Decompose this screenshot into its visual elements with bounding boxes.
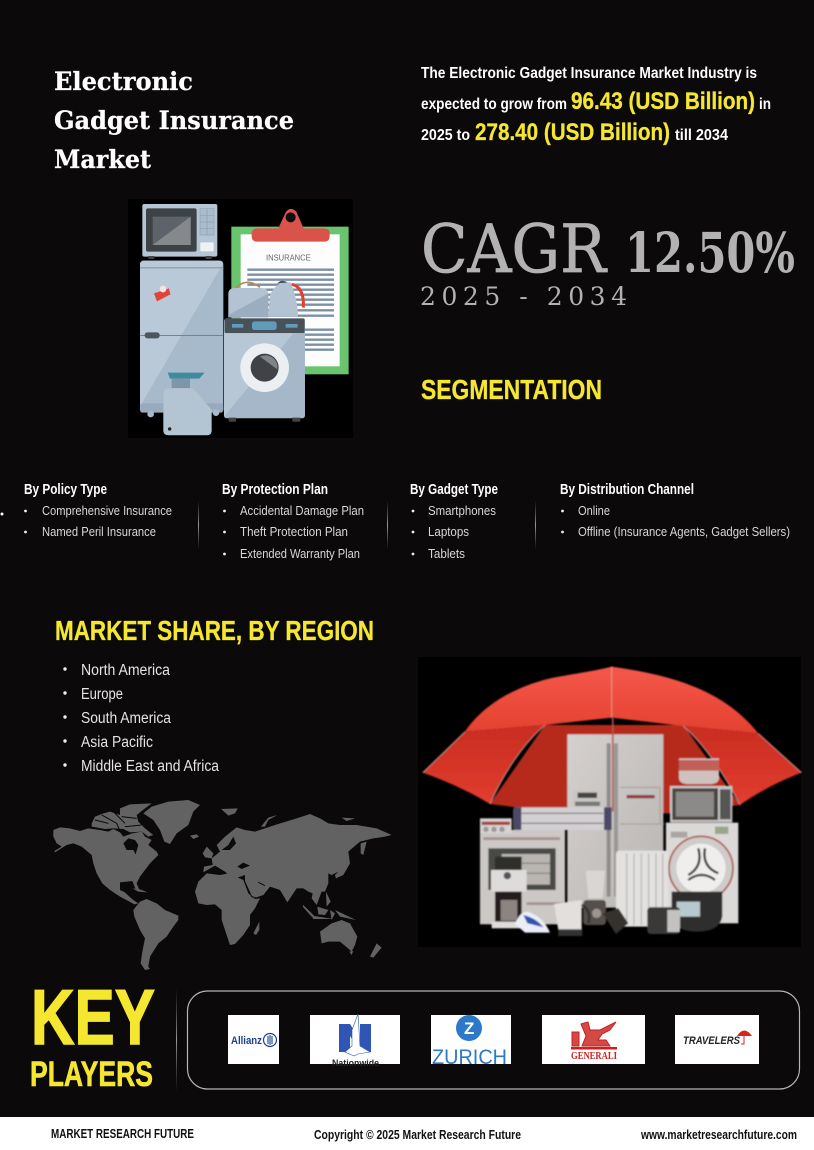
region list: Middle East and Africa: [81, 758, 219, 775]
segment: by distribution channel: Online: [578, 503, 610, 518]
washing machine: [224, 318, 305, 422]
logo: Allianz: Allianz: [231, 1035, 262, 1047]
stove: [480, 830, 565, 924]
segment: by protection plan: By Protection Plan: [222, 482, 328, 498]
CAGR: 2025 - 2034: [420, 282, 627, 311]
segment: by gadget type: Smartphones: [428, 503, 496, 518]
region list: North America: [81, 662, 170, 679]
microwave: [142, 204, 217, 259]
segment: by gadget type: Tablets: [428, 546, 465, 561]
segment: by gadget type: Laptops: [428, 524, 469, 539]
logo: Generali: GENERALI: [571, 1051, 617, 1062]
logo: Allianz: [228, 1015, 279, 1064]
segment: by protection plan: [222, 482, 364, 561]
market growth statement: expected to grow from: [421, 96, 567, 113]
heater tube: [513, 807, 612, 830]
logo: Generali: [542, 1015, 645, 1064]
logo: Travelers: [675, 1015, 759, 1064]
umbrella canopy: [465, 667, 758, 733]
kettle: [554, 900, 582, 930]
logo: Zurich: Z: [464, 1019, 474, 1038]
fridge: [567, 734, 663, 908]
world map: [53, 800, 392, 970]
segment: by gadget type: [410, 482, 498, 561]
steamer: [679, 758, 719, 784]
CAGR: [420, 211, 795, 311]
heading: key players: KEY: [31, 973, 155, 1061]
segment: by protection plan: Accidental Damage Plan: [240, 503, 364, 518]
toaster: [647, 907, 680, 934]
logo: Nationwide: [310, 1014, 400, 1068]
clipboard: INSURANCE: [266, 253, 311, 262]
logo: Zurich: ZURICH: [432, 1046, 507, 1069]
rice cooker: [672, 892, 722, 932]
CAGR: CAGR: [421, 211, 608, 288]
stray bullet: [0, 512, 4, 516]
heading: segmentation: SEGMENTATION: [421, 374, 602, 405]
market growth statement: [421, 65, 771, 146]
segment: by distribution channel: [560, 482, 790, 539]
region list: South America: [81, 710, 171, 727]
market growth statement: 2025 to: [421, 127, 470, 144]
segment: by policy type: By Policy Type: [24, 482, 107, 498]
market growth statement: 278.40 (USD Billion): [475, 119, 670, 146]
fridge: [140, 261, 223, 417]
segment: by distribution channel: Offline (Insurance Agents, Gadget Sellers): [578, 524, 790, 539]
region list: Asia Pacific: [81, 734, 153, 751]
title: Electronic: [54, 67, 193, 96]
logo: Nationwide: Nationwide: [332, 1058, 379, 1068]
travel cup: [603, 908, 628, 934]
title: Gadget Insurance: [54, 106, 294, 135]
market growth statement: in: [759, 96, 771, 113]
umbrella pole: [607, 743, 611, 897]
umbrella underside: [490, 725, 740, 813]
segment: by protection plan: Extended Warranty Plan: [240, 546, 360, 561]
photo: umbrella over appliances: [418, 657, 802, 947]
region list: [63, 662, 219, 775]
microwave: [670, 786, 732, 822]
logo: Travelers: TRAVELERS: [683, 1035, 741, 1047]
logo: Zurich: [431, 1015, 511, 1069]
segment: by policy type: [24, 482, 172, 539]
title: [54, 67, 294, 174]
segment: by distribution channel: By Distribution Channel: [560, 482, 694, 498]
coffee machine: [491, 870, 527, 892]
clipboard: [231, 209, 349, 374]
iron: [515, 912, 550, 933]
heading: key players: [30, 973, 155, 1094]
market growth statement: 96.43 (USD Billion): [571, 88, 755, 115]
blender: [163, 373, 212, 435]
heading: key players: PLAYERS: [30, 1055, 153, 1094]
radiator: [616, 851, 668, 927]
region list: Europe: [81, 686, 123, 703]
footer: MARKET RESEARCH FUTURE: [51, 1127, 194, 1141]
illustration: appliances and insurance clipboard: [128, 199, 353, 438]
toaster and kettle: [228, 281, 303, 317]
footer: [0, 1117, 814, 1150]
segment: by policy type: Named Peril Insurance: [42, 524, 156, 539]
segment: by protection plan: Theft Protection Plan: [240, 524, 348, 539]
segment: by gadget type: By Gadget Type: [410, 482, 498, 498]
segment: by policy type: Comprehensive Insurance: [42, 503, 172, 518]
washing machine: [666, 823, 738, 923]
panel: key players logos: [188, 991, 800, 1089]
blender: [586, 871, 605, 898]
market growth statement: The Electronic Gadget Insurance Market Industry is: [421, 65, 757, 82]
market growth statement: till 2034: [675, 127, 728, 144]
heading: market share: MARKET SHARE, BY REGION: [55, 615, 374, 646]
footer: Copyright © 2025 Market Research Future: [314, 1128, 521, 1142]
title: Market: [54, 145, 151, 174]
